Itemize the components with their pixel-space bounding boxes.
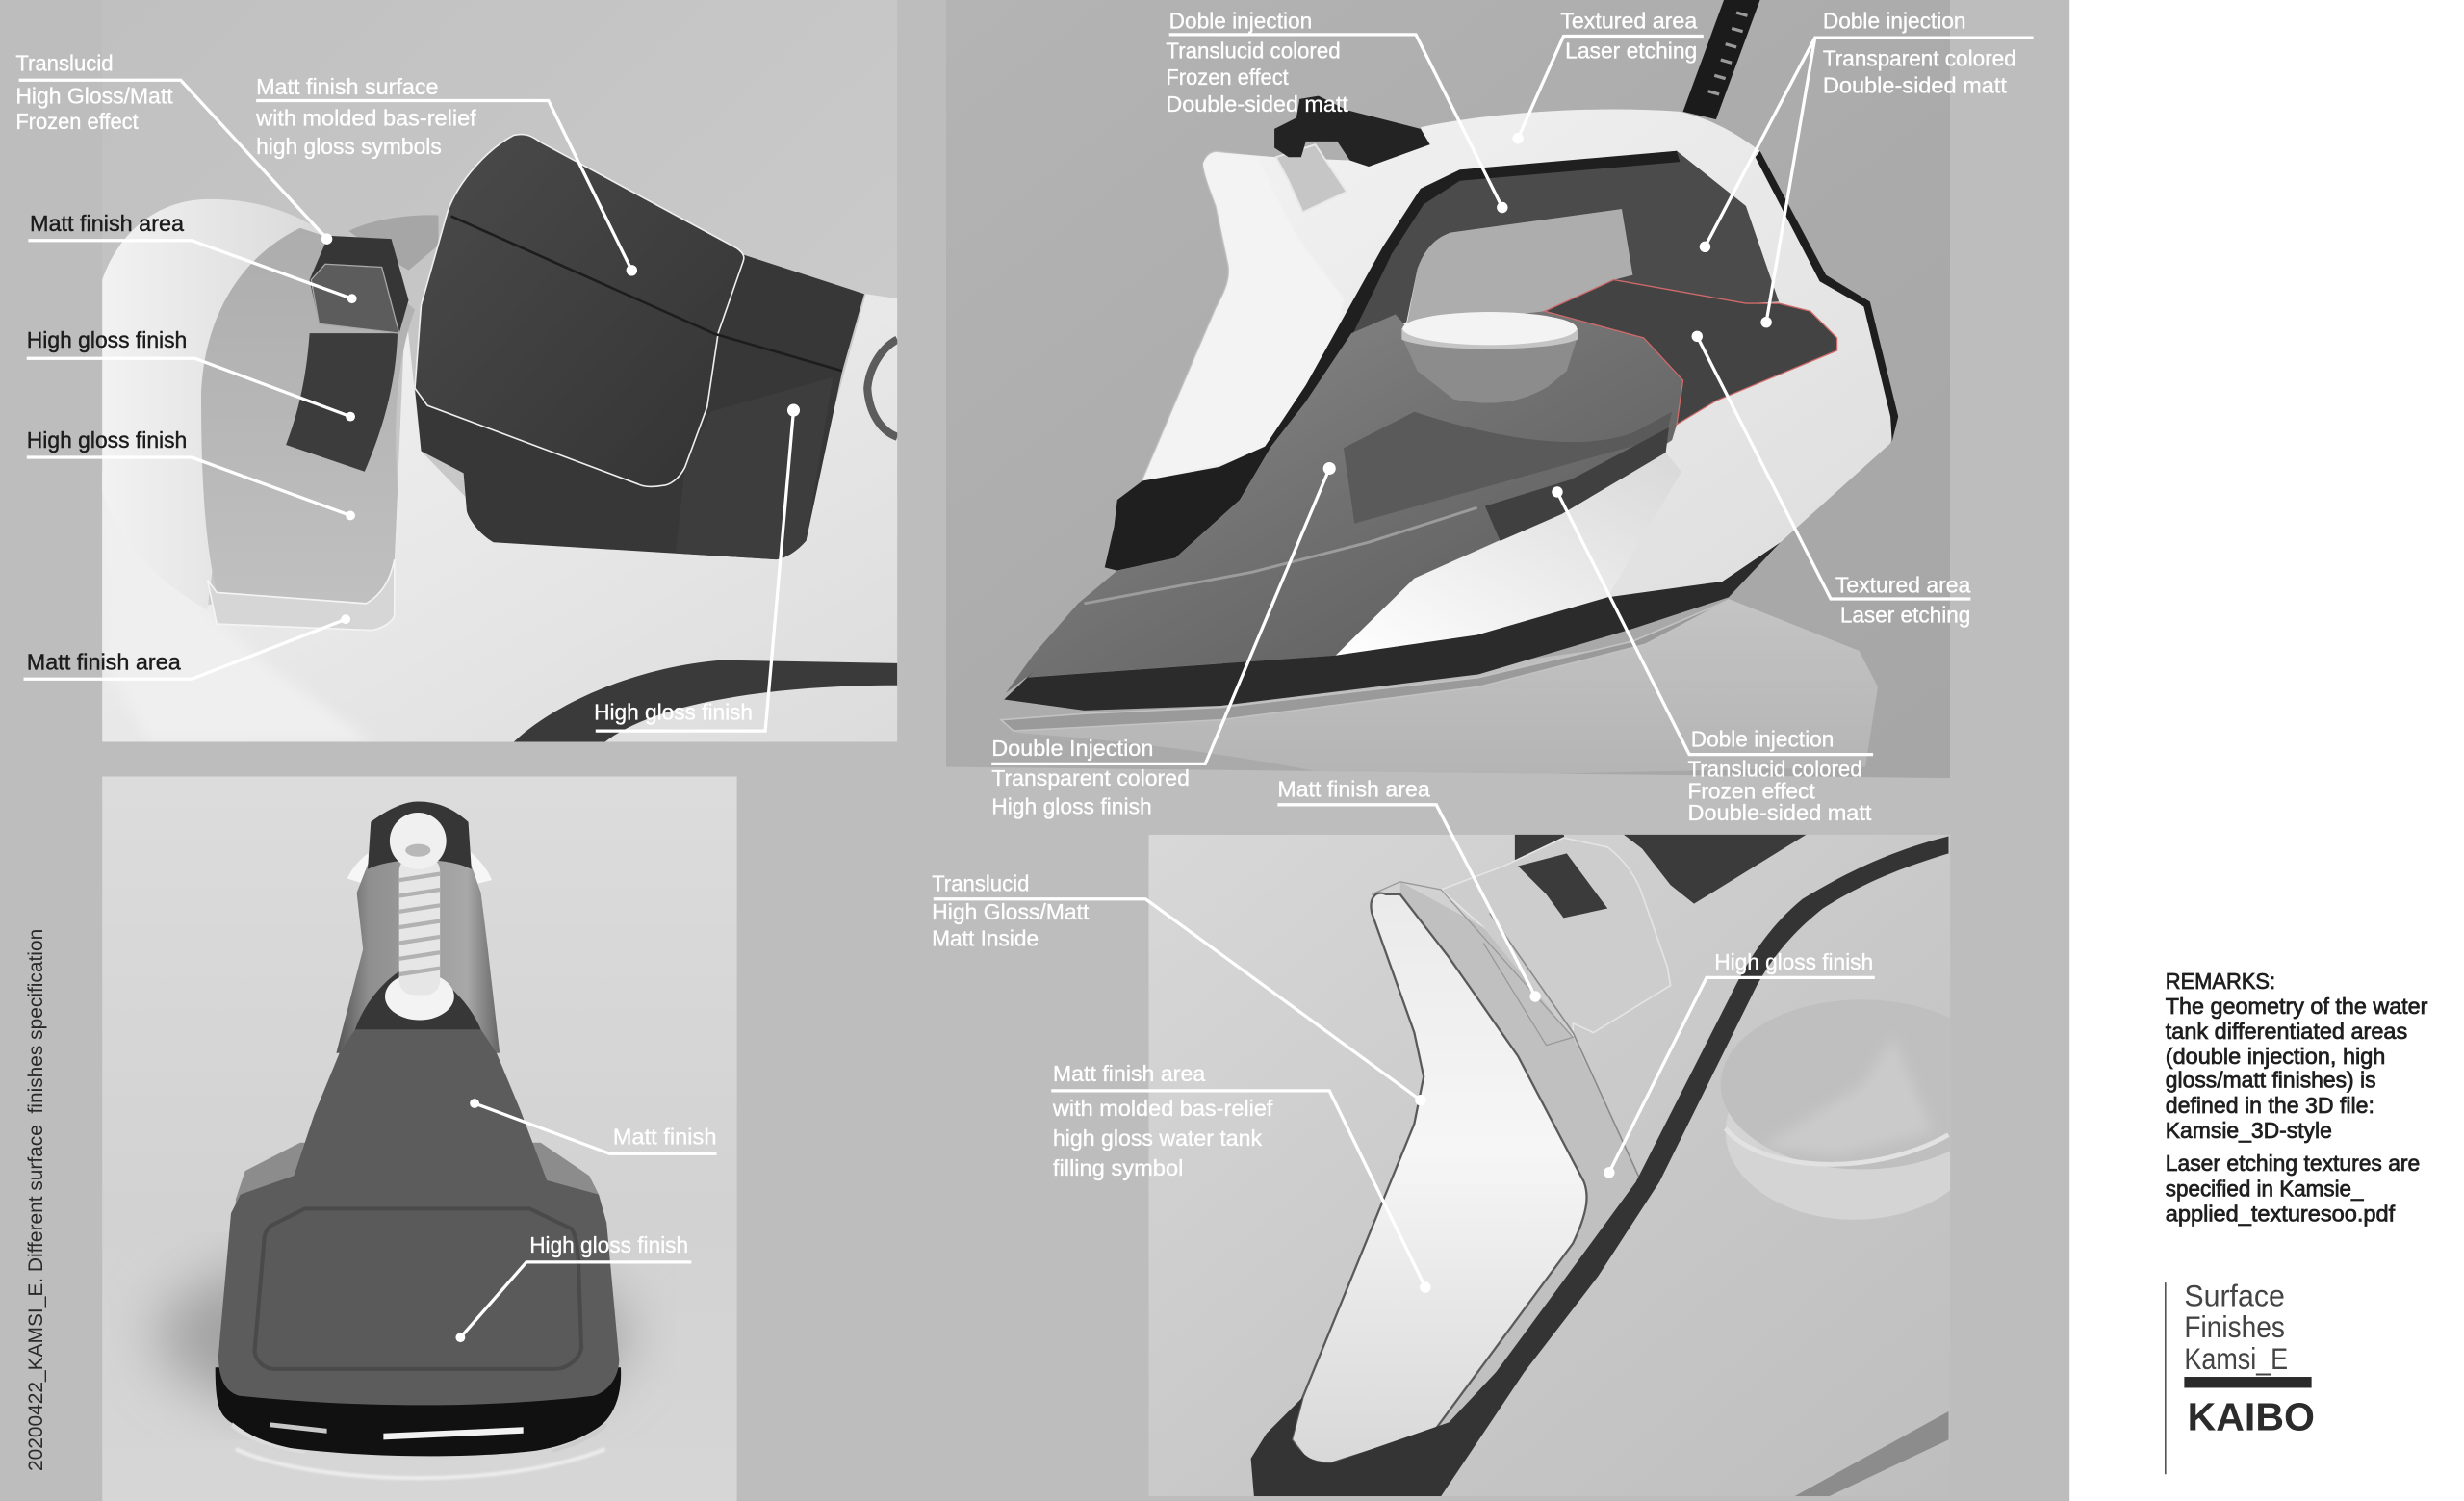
- right filler cup lower: [1726, 1044, 1983, 1220]
- dark main body: [218, 964, 619, 1405]
- tank highlight: [1142, 152, 1344, 481]
- trigger button translucent: [1276, 144, 1347, 212]
- callout: translucid matt inside: High Gloss/Matt: [932, 899, 1090, 924]
- callout: translucid matt inside: Matt Inside: [932, 926, 1039, 951]
- callout: high gloss window: [27, 327, 355, 421]
- neck translucent section: [1400, 882, 1639, 1431]
- title block with logo: Kamsi_E: [2184, 1342, 2288, 1376]
- translucent outer halo: [102, 199, 333, 609]
- panel: iron top view: [102, 776, 737, 1501]
- callout: translucid knob: Translucid: [15, 50, 114, 75]
- callout: matt finish water tank: filling symbol: [1053, 1155, 1183, 1180]
- dark knob top: [310, 236, 408, 333]
- logo: KAIBO: KAIBO: [2188, 1395, 2315, 1439]
- remarks text block: defined in the 3D file:: [2166, 1093, 2374, 1118]
- callout: doble injection handle: Frozen effect: [1166, 65, 1289, 90]
- cord ring: [390, 813, 447, 869]
- callout: high gloss tank: [27, 427, 355, 520]
- title block with logo: Finishes: [2184, 1310, 2285, 1344]
- remarks text block: gloss/matt finishes) is: [2166, 1068, 2376, 1093]
- callout: translucid matt inside: [932, 871, 1426, 1105]
- callout: double injection front: High gloss finish: [991, 794, 1152, 819]
- callout: high gloss housing: High gloss finish: [594, 700, 753, 725]
- callout: translucid knob: Frozen effect: [15, 109, 139, 134]
- callout: textured top: Laser etching: [1565, 38, 1697, 63]
- callout: translucid knob: [15, 50, 332, 245]
- rear black edge stripe: [1756, 151, 1898, 442]
- panel: steam control close-up: [102, 0, 897, 742]
- callout: doble injection rear: Double-sided matt: [1823, 72, 2008, 97]
- matt cover with molded panel: [415, 135, 744, 487]
- ribbed cord guard: [399, 857, 440, 995]
- callout: doble injection rear: Transparent colored: [1823, 46, 2016, 71]
- callout: textured top: Textured area: [1560, 8, 1698, 33]
- remarks text block: (double injection, high: [2166, 1044, 2385, 1069]
- black base band: [216, 1367, 621, 1456]
- screw base: [385, 972, 454, 1020]
- callout: double injection front: Transparent colored: [991, 765, 1190, 790]
- callout: doble injection lower: Frozen effect: [1687, 778, 1815, 803]
- floor shading: [102, 603, 350, 738]
- cap lip: [1726, 1128, 1948, 1164]
- remarks text block: tank differentiated areas: [2166, 1019, 2407, 1044]
- dark handle: [1351, 151, 1779, 333]
- callout: matt finish water tank: [1051, 1061, 1431, 1293]
- translucent fill door: [1441, 838, 1671, 1046]
- callout: double injection front: Double Injection: [991, 736, 1153, 761]
- remarks text block: specified in Kamsie_: [2166, 1176, 2364, 1201]
- translucent tank body: [201, 228, 415, 604]
- white iron body: [1117, 110, 1898, 656]
- callout: doble injection lower: [1552, 486, 1873, 825]
- callout: matt finish area knob: [28, 211, 357, 303]
- dark interior block: [1622, 833, 1809, 904]
- callout: matt finish surface: high gloss symbols: [256, 134, 442, 159]
- panel: full iron side view: [946, 0, 1950, 778]
- dark window: [1518, 853, 1607, 918]
- callout: matt finish surface: [255, 74, 637, 275]
- callout: matt finish surface: Matt finish surface: [256, 74, 439, 99]
- callout: doble injection rear: Doble injection: [1823, 8, 1965, 33]
- corner band: [1794, 1411, 1948, 1496]
- translucent front panel: [1006, 311, 1683, 693]
- callout: textured top: [1512, 8, 1704, 143]
- black base arch: [514, 660, 897, 742]
- etched frozen seam: [1085, 507, 1477, 604]
- dark seam line: [451, 216, 842, 371]
- neck: [336, 857, 500, 1053]
- remarks text block: [2166, 969, 2428, 1226]
- rear dark housing: [415, 254, 864, 560]
- shadow under iron: [157, 1250, 629, 1422]
- panel: water tank close-up: [1148, 833, 2004, 1496]
- remarks text block: The geometry of the water: [2166, 994, 2428, 1019]
- filler cap: [1402, 312, 1577, 345]
- base highlights: [231, 1422, 606, 1454]
- lighter housing facet: [676, 537, 807, 560]
- black swoosh: [1251, 836, 1948, 1496]
- translucent shoulders: [235, 1142, 599, 1203]
- bright front body wedge: [1336, 453, 1681, 656]
- black handle stripe: [1105, 151, 1680, 571]
- cap highlight pane: [1760, 1037, 1933, 1155]
- floor reflection: [1014, 599, 1878, 778]
- matt white tank panel: [1292, 893, 1587, 1463]
- power cord: [1683, 0, 1760, 119]
- inset high gloss panel: [254, 1208, 581, 1369]
- callout: doble injection lower: Translucid colored: [1687, 756, 1862, 781]
- base reflection: [236, 1449, 605, 1478]
- callout: doble injection lower: Double-sided matt: [1687, 800, 1872, 825]
- callout: translucid knob: High Gloss/Matt: [15, 84, 173, 109]
- callout: high gloss top view: [455, 1232, 691, 1342]
- callout: doble injection rear: [1700, 8, 2034, 327]
- head dark arc: [368, 802, 472, 869]
- dark upper neck patch: [355, 970, 481, 1030]
- white iron body: [102, 294, 897, 742]
- small display outline: [867, 340, 897, 437]
- callout: high gloss tank: High gloss finish: [27, 427, 187, 453]
- black sole: [1004, 542, 1781, 711]
- cap rim: [1401, 328, 1578, 349]
- callout: high gloss housing: [594, 404, 800, 731]
- vertical document title: 20200422_KAMSI_E. Different surface finishes specification: [25, 929, 47, 1471]
- knob face outline: [311, 264, 399, 333]
- callout: matt finish door: [1277, 777, 1541, 1002]
- callout: matt finish water tank: Matt finish area: [1053, 1061, 1206, 1086]
- water tank cup: [1401, 336, 1578, 403]
- callout: matt finish water tank: high gloss water tank: [1053, 1126, 1263, 1151]
- cord hole: [405, 844, 430, 857]
- callout: matt finish top view: [470, 1099, 716, 1153]
- callout: high gloss window: High gloss finish: [27, 327, 187, 352]
- grey part behind control: [348, 215, 439, 271]
- callout: matt finish water tank: with molded bas-relief: [1052, 1096, 1273, 1121]
- rear textured area outlined in red: [1545, 280, 1837, 425]
- lip outline: [1372, 882, 1573, 1046]
- callout: doble injection handle: Double-sided matt: [1166, 91, 1348, 116]
- callout: double injection front: [991, 462, 1336, 819]
- remarks text block: applied_texturesoo.pdf: [2166, 1201, 2396, 1226]
- remarks text block: REMARKS:: [2166, 969, 2275, 994]
- callout: textured rear: [1692, 331, 1971, 627]
- callout: matt finish tank base: [23, 614, 350, 679]
- right filler cap: [1721, 999, 2004, 1170]
- title block with logo: [2165, 1280, 2315, 1474]
- black steam trigger: [1274, 96, 1430, 167]
- dark lower strip: [1485, 427, 1669, 542]
- callout: matt finish tank base: Matt finish area: [27, 649, 181, 674]
- cord ribs: [1708, 13, 1748, 94]
- callout: high gloss top view: High gloss finish: [529, 1232, 688, 1257]
- dark inner reflection: [1344, 412, 1672, 524]
- dark window in tank: [286, 333, 398, 472]
- white wings: [347, 852, 492, 884]
- silver sole strip: [1001, 601, 1729, 731]
- callout: doble injection handle: [1166, 8, 1508, 213]
- translucent tank base: [208, 559, 395, 631]
- handle opening: [1406, 209, 1632, 338]
- callout: matt finish door: Matt finish area: [1277, 777, 1430, 802]
- callout: textured rear: Laser etching: [1840, 602, 1970, 627]
- callout: doble injection lower: Doble injection: [1691, 726, 1834, 751]
- callout: translucid matt inside: Translucid: [932, 871, 1029, 896]
- remarks text block: Laser etching textures are: [2166, 1151, 2420, 1176]
- callout: high gloss neck: [1604, 949, 1875, 1178]
- callout: matt finish top view: Matt finish: [613, 1124, 716, 1149]
- callout: matt finish surface: with molded bas-relief: [255, 106, 476, 131]
- dark top stem: [1515, 833, 1567, 866]
- callout: high gloss neck: High gloss finish: [1714, 949, 1873, 974]
- neck outline: [1490, 913, 1639, 1178]
- callout: textured rear: Textured area: [1835, 572, 1971, 597]
- remarks text block: Kamsie_3D-style: [2166, 1118, 2332, 1143]
- title block with logo: Surface: [2184, 1280, 2285, 1313]
- callout: doble injection handle: Doble injection: [1169, 8, 1312, 33]
- callout: doble injection handle: Translucid colored: [1166, 38, 1341, 63]
- callout: matt finish area knob: Matt finish area: [30, 211, 184, 236]
